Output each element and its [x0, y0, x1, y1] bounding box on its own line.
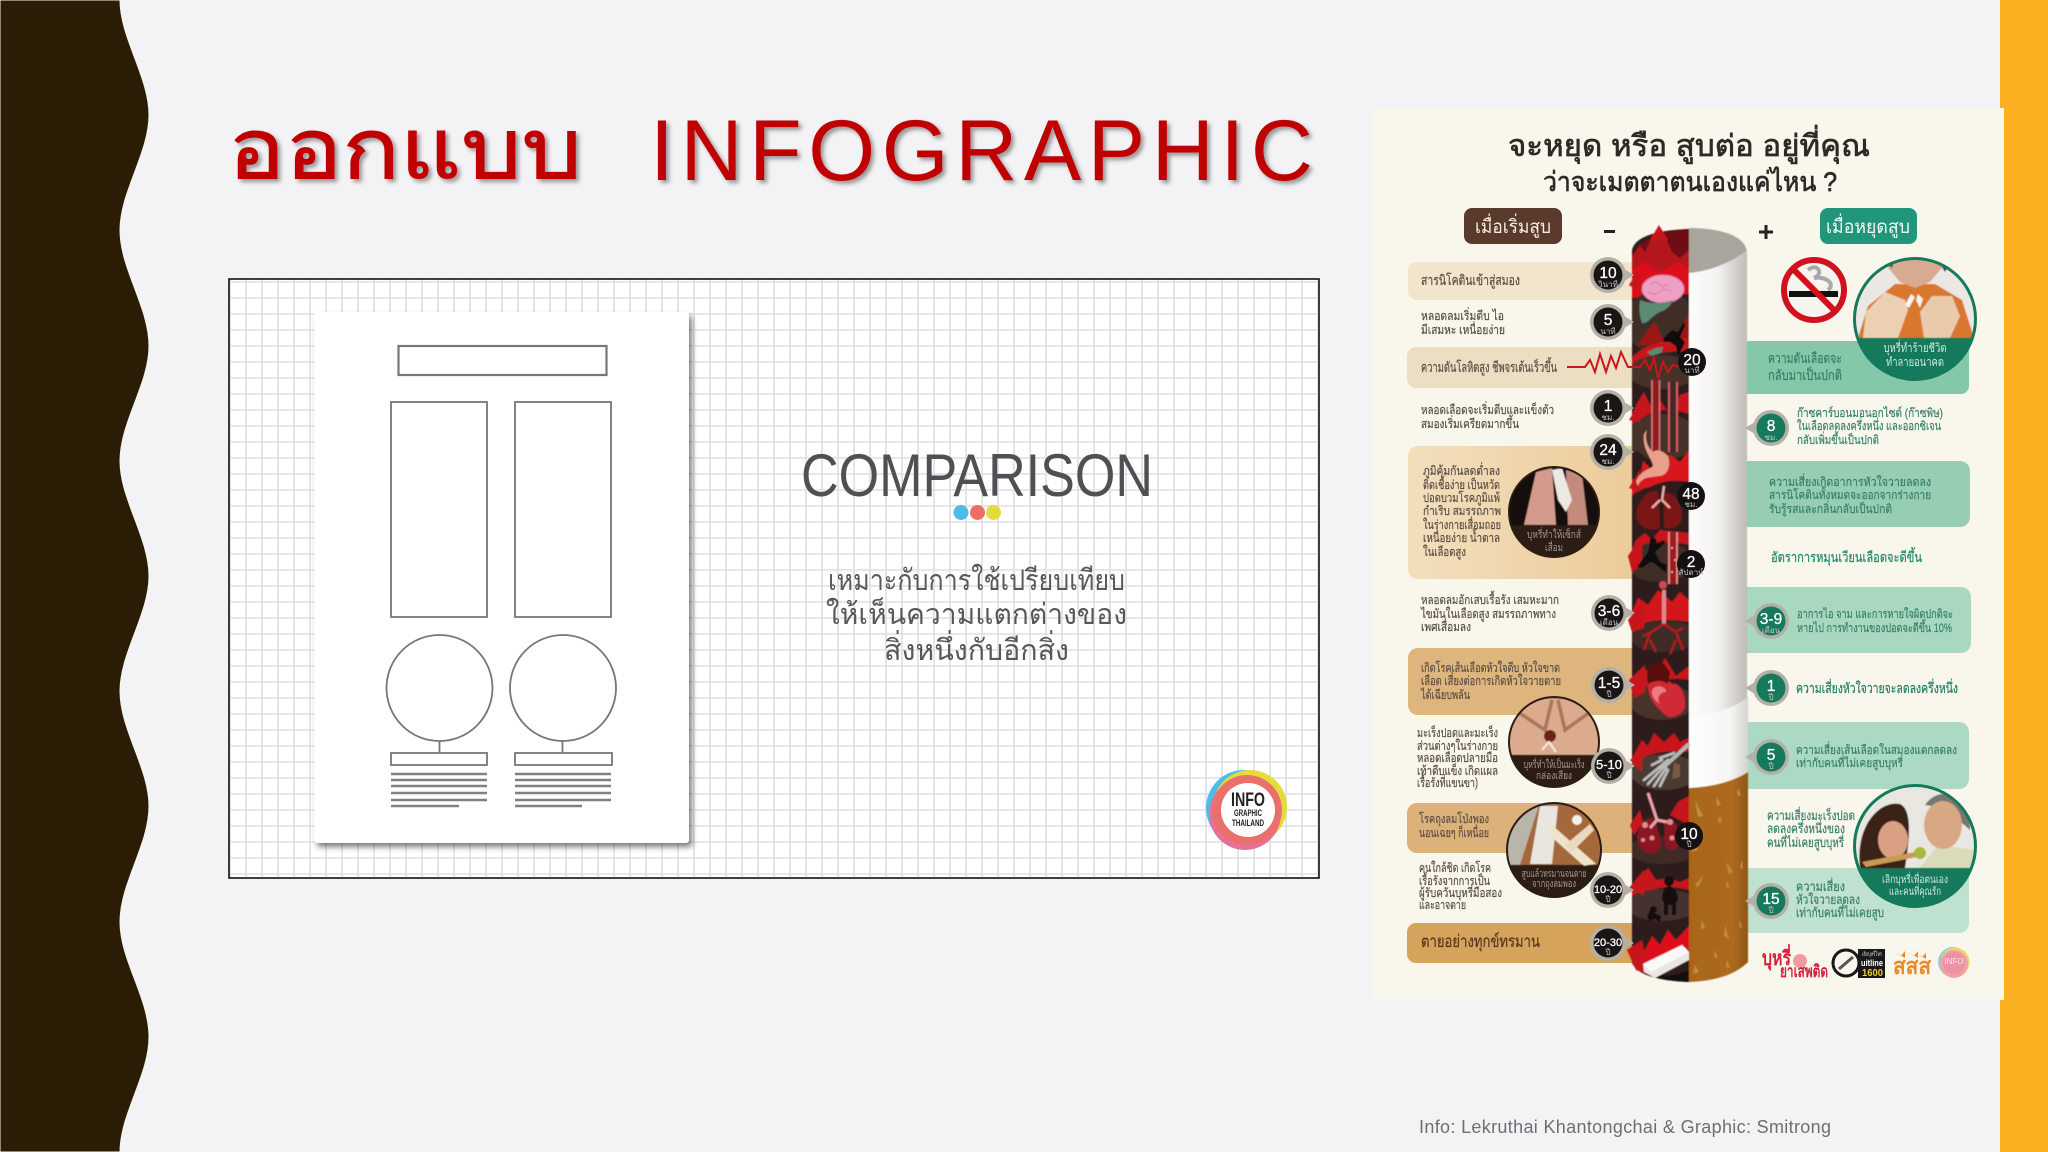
logo: cigarettes are drugs [1762, 943, 1828, 981]
row: carbon monoxide: ในเลือดลดลงครึ่งหนึ่ง และออกซิเจน [1797, 417, 1941, 433]
row: blood pressure normal: กลับมาเป็นปกติ [1768, 366, 1842, 383]
row: immunity [1423, 462, 1501, 560]
time badge: 20 minutes: นาที [1684, 366, 1700, 375]
time badge: 3-9 months: เดือน [1762, 626, 1781, 635]
time badge: 48 hours: 48 [1682, 486, 1700, 503]
time badge: 1 year: ปี [1768, 693, 1774, 702]
time badge: 3-6 months: เดือน [1600, 618, 1619, 627]
row: cancer: เท้าตีบแข็ง เกิดแผล [1417, 763, 1498, 778]
time badge: 48 hours: ชม. [1685, 500, 1697, 509]
time badge: 1 hour: 1 [1604, 398, 1612, 415]
row: lung cancer risk: ความเสี่ยงมะเร็งปอด [1767, 806, 1855, 823]
time badge: 24 hours [1590, 434, 1634, 470]
time badge: 10-20 years: 10-20 [1594, 884, 1622, 896]
time badge: 3-6 months: 3-6 [1598, 603, 1620, 620]
photo circle: couple: เลิกบุหรี่เพื่อตนเอง [1882, 871, 1948, 886]
row: carbon monoxide [1797, 406, 1943, 447]
row: immunity: เหนื่อยง่าย น้ำตาล [1423, 528, 1500, 545]
photo circle: impotence: บุหรี่ทำให้เซ็กส์ [1527, 527, 1581, 541]
tipping band [1689, 697, 1748, 790]
organ: liver [1639, 300, 1673, 323]
row: immunity: ในเลือดสูง [1423, 545, 1466, 560]
figure: falling person [1663, 322, 1685, 357]
time badge: 20-30 years: ปี [1605, 948, 1611, 957]
row: chronic bronchitis: หลอดลมอักเสบเรื้อรัง เสมหะมาก [1421, 590, 1559, 607]
row: chronic bronchitis [1420, 590, 1559, 634]
time badge: 5-10 years: 5-10 [1596, 757, 1622, 772]
row: immunity: ปอดบวมโรคภูมิแพ้ [1423, 490, 1500, 506]
row: emphysema: โรคถุงลมโป่งพอง [1419, 811, 1489, 827]
badge: when starting [1464, 208, 1562, 244]
logo: cigarettes are drugs: บุหรี่ [1762, 943, 1791, 971]
template sheet with wireframe [314, 312, 689, 843]
logo: quitline 1600 [1833, 949, 1885, 979]
time badge: 1 year: 1 [1767, 678, 1775, 695]
photo circle: breaking cigarette [1853, 255, 1977, 381]
time badge: 10 seconds: วินาที [1598, 280, 1618, 289]
row: emphysema [1419, 811, 1489, 840]
photo circle: couple [1853, 784, 1977, 908]
paper side of cigarette [1689, 229, 1747, 790]
row: immunity: กำเริบ สมรรถภาพ [1423, 504, 1501, 518]
row: heart risk equal: ความเสี่ยง [1796, 878, 1845, 894]
organ: dark red lungs [1636, 486, 1682, 529]
logo: quitline 1600: 1600 [1862, 968, 1883, 979]
row: stroke risk [1796, 741, 1957, 771]
badge: when quitting [1820, 208, 1917, 244]
left wavy dark band [0, 0, 149, 1152]
time badge: 1 year [1745, 670, 1789, 706]
row: second-hand smoke [1419, 860, 1502, 912]
row: chronic bronchitis: ไขมันในเลือดสูง สมรรถภาพทาง [1420, 607, 1556, 622]
title: INFOGRAPHIC [650, 103, 1313, 199]
row: blood pressure normal: ความดันเลือดจะ [1768, 350, 1842, 366]
row: emphysema: นอนเฉยๆ ก็เหนื่อย [1419, 824, 1489, 840]
row: blood pressure normal [1768, 350, 1842, 383]
time badge: 2 weeks: สัปดาห์ [1679, 567, 1703, 577]
row: heart risk halved: ความเสี่ยงหัวใจวายจะลดลงครึ่งหนึ่ง [1796, 679, 1958, 696]
row: coronary disease: ได้เฉียบพลัน [1420, 688, 1470, 702]
photo circle: laryngeal cancer [1508, 696, 1600, 788]
time badge: 20-30 years: 20-30 [1594, 937, 1622, 949]
time badge: 1-5 years: 1-5 [1598, 675, 1620, 692]
photo circle: impotence [1508, 466, 1600, 558]
row: bronchi: หลอดลมเริ่มตีบ ไอ [1421, 307, 1504, 323]
right orange bar [2000, 0, 2048, 1152]
row: stroke risk: ความเสี่ยงเส้นเลือดในสมองแตกลดลง [1796, 741, 1957, 757]
row: cough and breathing: หายไป การทำงานของปอดจะดีขึ้น 10% [1797, 619, 1952, 635]
time badge: 2 weeks: 2 [1687, 554, 1695, 571]
cigarette butt [1643, 945, 1689, 978]
artery with plaque [1659, 532, 1678, 589]
photo circle: couple: และคนที่คุณรัก [1889, 883, 1941, 898]
row: immunity: ภูมิคุ้มกันลดต่ำลง [1423, 462, 1500, 479]
row: cancer: หลอดเลือดปลายมือ [1417, 751, 1498, 765]
ecg line [1567, 352, 1680, 378]
logo: thai health: สสส [1893, 953, 1932, 979]
time badge: 3-9 months [1745, 603, 1789, 639]
row: second-hand smoke: ผู้รับควันบุหรี่มือสอง [1419, 884, 1502, 901]
logo: cigarettes are drugs: ยาเสพติด [1780, 962, 1828, 981]
infographic title [1508, 125, 1870, 197]
three coloured dots [954, 505, 1001, 520]
row: cancer [1417, 725, 1498, 790]
logo: quitline 1600: เลิกบุหรี่โทร [1862, 950, 1883, 958]
time badge: 24 hours: ชม. [1602, 457, 1614, 466]
photo circle: breaking cigarette: ทำลายอนาคต [1886, 355, 1944, 369]
cut end of paper [1689, 228, 1746, 273]
time badge: 1 hour: ชม. [1602, 413, 1614, 422]
title [228, 102, 1313, 199]
logo: infographic thailand small: INFO [1944, 957, 1964, 966]
heading: comparison: COMPARISON [801, 442, 1153, 509]
time badge: 48 hours [1677, 482, 1705, 510]
row: second-hand smoke: เรื้อรังจากการเป็น [1419, 871, 1490, 888]
blood vessels [1651, 380, 1678, 452]
diseased lungs [1637, 793, 1680, 854]
row: lung cancer risk: คนที่ไม่เคยสูบบุหรี่ [1767, 834, 1844, 851]
row: circulation: อัตราการหมุนเวียนเลือดจะดีขึ้น [1771, 547, 1922, 566]
row: arteries: หลอดเลือดจะเริ่มตีบและแข็งตัว [1421, 401, 1554, 417]
time badge: 5 years: 5 [1767, 747, 1775, 764]
row: carbon monoxide: กลับเพิ่มขึ้นเป็นปกติ [1797, 431, 1879, 447]
panel: comparison template [229, 279, 1319, 878]
time badge: 5-10 years: ปี [1606, 771, 1612, 780]
photo circle: emphysema patient [1506, 802, 1602, 898]
time badge: 8 hours [1745, 410, 1789, 446]
figures: woman and baby [1647, 876, 1678, 922]
row: cancer: ส่วนต่างๆในร่างกาย [1417, 739, 1498, 753]
time badge: 10-20 years: ปี [1605, 895, 1611, 904]
row: blood pressure: ความดันโลหิตสูง ชีพจรเต้นเร็วขึ้น [1421, 357, 1557, 376]
time badge: 20 minutes: 20 [1683, 352, 1701, 369]
time badge: 15 years: 15 [1762, 891, 1780, 908]
row: heart risk equal [1796, 878, 1884, 921]
infographic title: จะหยุด หรือ สูบต่อ อยู่ที่คุณ [1508, 125, 1870, 165]
time badge: 5 years [1745, 739, 1789, 775]
row: second-hand smoke: คนใกล้ชิด เกิดโรค [1419, 860, 1491, 875]
organ: heart [1647, 663, 1685, 717]
infographic title: ว่าจะเมตตาตนเองแค่ไหน ? [1543, 167, 1837, 197]
comparison description: เหมาะกับการใช้เปรียบเทียบ [828, 563, 1125, 597]
row: heart risk equal: เท่ากับคนที่ไม่เคยสูบ [1796, 904, 1884, 921]
time badge: 5 minutes: 5 [1604, 312, 1612, 329]
row: stroke risk: เท่ากับคนที่ไม่เคยสูบบุหรี่ [1796, 754, 1903, 771]
right column text [1767, 350, 1958, 921]
comparison description: ให้เห็นความแตกต่างของ [826, 596, 1127, 631]
row: cancer: เรื้อรังที่แขนขา) [1417, 773, 1478, 790]
row: immunity: ในร่างกายเสื่อมถอย [1423, 516, 1501, 532]
time badge: 10 years [1675, 822, 1703, 850]
photo circle: breaking cigarette: บุหรี่ทำร้ายชีวิต [1884, 339, 1946, 356]
time badge: 15 years: ปี [1768, 906, 1774, 915]
row: heart attack risk [1769, 473, 1931, 517]
credit line: Info: Lekruthai Khantongchai & Graphic: Smitrong [1419, 1117, 1831, 1137]
figure: collapsing person [1637, 538, 1667, 573]
row: bronchi: มีเสมหะ เหนื่อยง่าย [1421, 321, 1505, 337]
time badge: 5 minutes: นาที [1600, 327, 1616, 336]
badge: when starting: เมื่อเริ่มสูบ [1475, 213, 1551, 238]
right column background bars [1730, 341, 1971, 933]
row: immunity: ติดเชื้อง่าย เป็นหวัด [1423, 475, 1500, 492]
time badge: 20 minutes [1678, 348, 1706, 376]
time badge: 15 years [1745, 883, 1789, 919]
time badge: 24 hours: 24 [1599, 442, 1617, 459]
time badge: 10 years: ปี [1686, 840, 1692, 849]
time badge: 10 seconds: 10 [1599, 265, 1617, 282]
bronchi [1643, 590, 1683, 654]
organ: small green patch [1647, 347, 1663, 356]
icon: no smoking [1784, 260, 1844, 320]
organ: stomach [1636, 430, 1669, 486]
row: arteries [1421, 401, 1554, 431]
photo circle: impotence: เสื่อม [1545, 540, 1563, 554]
row: cough and breathing: อาการไอ จาม และการหายใจผิดปกติจะ [1797, 607, 1953, 621]
row: bronchi [1421, 307, 1505, 337]
time badge: 3-6 months [1591, 595, 1635, 631]
infographic thailand logo: THAILAND [1232, 818, 1264, 828]
row: carbon monoxide: ก๊าซคาร์บอนมอนอกไซด์ (ก๊าซพิษ) [1797, 406, 1943, 420]
photo circle: laryngeal cancer: กล่องเสียง [1536, 769, 1572, 782]
time badge: 10 years: 10 [1680, 826, 1698, 843]
logo: quitline 1600: uitline [1861, 958, 1883, 968]
infographic thailand logo: GRAPHIC [1234, 808, 1262, 818]
row: heart attack risk: รับรู้รสและกลิ่นกลับเป็นปกติ [1769, 500, 1892, 517]
row: lung cancer risk [1767, 806, 1855, 851]
row: painful death: ตายอย่างทุกข์ทรมาน [1421, 932, 1540, 952]
minus and plus signs [1604, 225, 1773, 239]
photo circle: laryngeal cancer: บุหรี่ทำให้เป็นมะเร็ง [1524, 757, 1584, 771]
time badge: 1-5 years [1591, 667, 1635, 703]
row: chronic bronchitis: เพศเสื่อมลง [1421, 618, 1471, 634]
time badge: 10-20 years [1590, 872, 1634, 908]
infographic thailand logo [1206, 770, 1287, 850]
row: lung cancer risk: ลดลงครึ่งหนึ่งของ [1767, 820, 1845, 836]
comparison description [826, 563, 1127, 667]
row: heart risk equal: หัวใจวายลดลง [1796, 892, 1860, 907]
row: coronary disease: เกิดโรคเส้นเลือดหัวใจตีบ หัวใจขาด [1421, 660, 1560, 675]
time badge: 2 weeks [1677, 550, 1705, 578]
infographic thailand logo: INFO [1231, 790, 1265, 811]
cigarette illustration [1624, 225, 1748, 985]
flame tongues outside body [1627, 225, 1668, 975]
time badge: 8 hours: 8 [1767, 418, 1775, 435]
left column background bars [1407, 262, 1648, 963]
row: second-hand smoke: และอาจตาย [1419, 898, 1466, 912]
row: coronary disease [1420, 660, 1561, 702]
row: cancer: มะเร็งปอดและมะเร็ง [1417, 725, 1498, 740]
burnt body of cigarette [1631, 228, 1690, 983]
time badge: 3-9 months: 3-9 [1760, 611, 1782, 628]
filter side of cigarette [1689, 772, 1748, 982]
panel: smoking infographic [1373, 108, 2004, 1000]
time badge: 5 minutes [1590, 304, 1634, 340]
row: heart attack risk: สารนิโคตินทั้งหมดจะออกจากร่างกาย [1769, 486, 1931, 502]
left column text [1417, 272, 1561, 952]
skeletal hand [1644, 745, 1688, 786]
time badge: 8 hours: ชม. [1765, 433, 1777, 442]
row: coronary disease: เลือด เสี่ยงต่อการเกิดหัวใจวายตาย [1421, 672, 1561, 688]
time badge: 20-30 years [1590, 925, 1634, 961]
time badge: 1-5 years: ปี [1606, 690, 1612, 699]
title: ออกแบบ [228, 102, 582, 196]
comparison description: สิ่งหนึ่งกับอีกสิ่ง [884, 630, 1069, 667]
row: heart attack risk: ความเสี่ยงเกิดอาการหัวใจวายลดลง [1769, 473, 1931, 489]
row: arteries: สมองเริ่มเครียดมากขึ้น [1421, 414, 1519, 431]
time badge: 10 seconds [1590, 257, 1634, 293]
photo circle: emphysema patient: สูบแล้วทรมานจนตาย [1522, 868, 1586, 880]
logo: infographic thailand small [1938, 947, 1970, 978]
time badge: 5-10 years [1591, 748, 1635, 784]
row: nicotine: สารนิโคตินเข้าสู่สมอง [1421, 272, 1520, 289]
organ: brain [1642, 275, 1684, 303]
row: cough and breathing [1797, 607, 1953, 635]
time badge: 5 years: ปี [1768, 762, 1774, 771]
badge: when quitting: เมื่อหยุดสูบ [1826, 213, 1910, 239]
time badge: 1 hour [1590, 390, 1634, 426]
photo circle: emphysema patient: จากถุงลมพอง [1532, 878, 1576, 890]
